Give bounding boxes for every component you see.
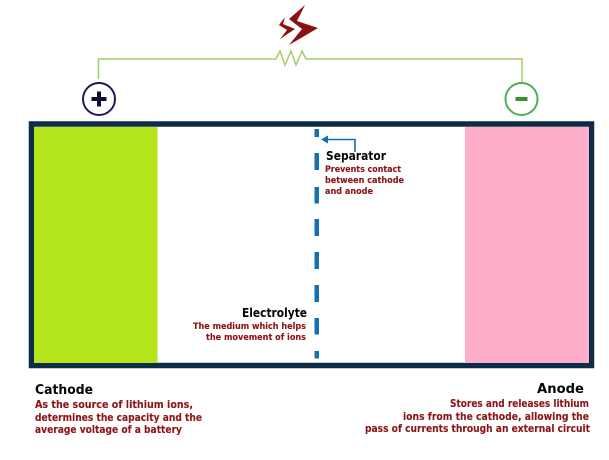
text: separator: and anode [325, 186, 373, 197]
text: cathode: average voltage of a battery [35, 424, 182, 436]
icon: plus terminal [83, 83, 115, 115]
text: separator: between cathode [325, 175, 404, 186]
text: cathode [35, 382, 202, 436]
text: separator: Separator [326, 148, 387, 163]
arrow: separator pointer [321, 136, 355, 152]
text: separator [325, 148, 404, 197]
text: separator: Prevents contact [325, 164, 402, 175]
text: anode: ions from the cathode, allowing the [403, 411, 589, 423]
icon: lightning bolt [279, 5, 318, 45]
text: anode: Stores and releases lithium [450, 398, 589, 410]
text: cathode: Cathode [35, 382, 93, 398]
text: cathode: determines the capacity and the [35, 412, 202, 424]
icon: minus terminal [506, 83, 538, 115]
anode block [465, 127, 589, 363]
battery frame [32, 124, 592, 366]
text: electrolyte: The medium which helps [193, 321, 306, 332]
circuit wire with resistor [98, 51, 522, 82]
text: electrolyte: Electrolyte [242, 305, 307, 320]
text: anode: Anode [537, 381, 584, 397]
cathode block [34, 127, 158, 363]
text: anode [365, 381, 590, 435]
text: electrolyte: the movement of ions [206, 332, 306, 343]
separator dashed line [314, 129, 319, 358]
text: electrolyte [193, 305, 307, 343]
text: cathode: As the source of lithium ions, [35, 399, 193, 411]
